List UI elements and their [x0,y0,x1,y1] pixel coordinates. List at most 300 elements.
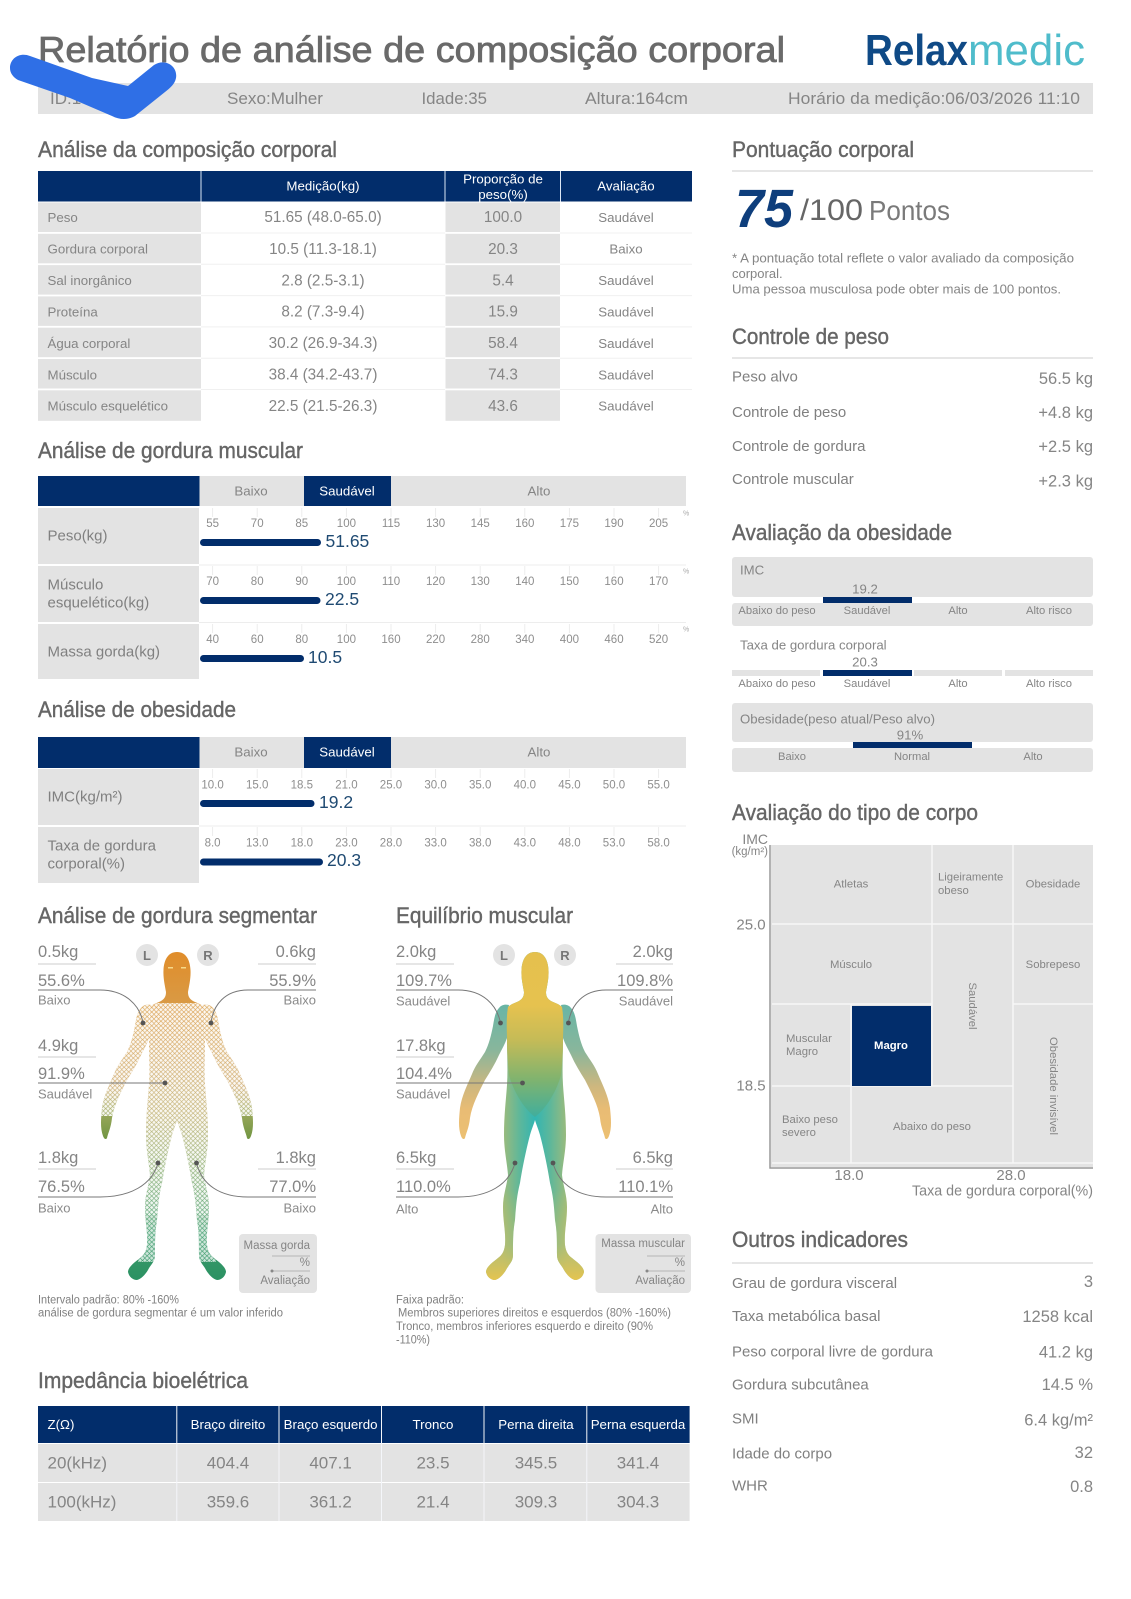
note: score explanation: corporal. [732,266,783,281]
list: other indicators: 32 [1075,1444,1093,1462]
note: standard range: Intervalo padrão: 80% -160% [38,1294,179,1306]
badge: L [136,944,158,966]
note: standard range: Membros superiores direitos e esquerdos (80% -160%) [398,1308,671,1320]
row: Taxa de gordura corporal: 23.0 [335,838,358,850]
label: left leg muscle [396,1149,451,1216]
row: Massa gorda: 520 [649,634,668,646]
gauge: IMC: 19.2 [852,582,878,596]
row: Gordura corporal: Gordura corporal [48,242,148,256]
figure: wireframe body [97,952,257,1280]
logo: Relaxmedic [865,26,1085,75]
badge: L: L [500,948,508,963]
list: other indicators: 14.5 % [1042,1376,1093,1394]
row: Taxa de gordura corporal: 28.0 [380,838,402,850]
row: Massa gorda: 340 [515,634,534,646]
label: right leg muscle: 6.5kg [633,1149,673,1167]
row: Água corporal: 58.4 [488,335,518,352]
heading: weight control: Controle de peso [732,324,889,349]
list: other indicators: Peso corporal livre de gordura [732,1344,934,1360]
label: right arm muscle: 2.0kg [633,943,673,961]
label: right arm muscle: Saudável [619,994,673,1008]
score: 75/100: 75 [735,179,794,239]
row: Músculo esquelético: 140 [515,576,534,588]
table: body composition: Proporção de [463,172,543,186]
row: Massa gorda: 10.5 [308,647,342,667]
row: Músculo esquelético: 130 [471,576,490,588]
list: other indicators: 41.2 kg [1039,1344,1093,1362]
row: Taxa de gordura corporal: 18.0 [291,838,313,850]
chart: obesity analysis: Saudável [319,744,375,760]
row: Taxa de gordura corporal: 13.0 [246,838,268,850]
label: left leg fat: 76.5% [38,1178,85,1196]
gauge: IMC: IMC [740,562,765,578]
chart: muscle fat analysis [38,476,689,679]
chart: body type matrix: Saudável [966,982,978,1030]
row: Massa gorda: 60 [251,634,264,646]
chart: obesity analysis [38,737,686,883]
list: other indicators: SMI [732,1410,759,1428]
legend: fat mass [239,1234,317,1293]
score: 75/100 [735,179,950,239]
label: trunk muscle [396,1037,452,1102]
row: 100 kHz: 309.3 [515,1492,557,1512]
logo: Relaxmedic: Relax [865,26,968,75]
axis labels: 18.0 [834,1167,864,1184]
badge: R [197,944,219,966]
table: body composition: Medição(kg) [286,178,360,194]
row: Sal inorgânico: Sal inorgânico [48,273,132,288]
row: IMC: 35.0 [469,780,491,792]
row: Gordura corporal: Baixo [609,242,643,256]
axis labels: 18.5 [736,1078,766,1094]
header row: Perna esquerda [591,1417,686,1432]
gauge: body fat rate: Alto risco [1026,678,1072,690]
row: Sal inorgânico [48,272,654,290]
row: Sal inorgânico: Saudável [598,273,654,288]
row: Músculo esquelético: 22.5 [325,589,359,609]
row: Proteína: Proteína [48,304,98,320]
gauge: IMC: Saudável [844,605,890,617]
row: IMC: 55.0 [647,780,670,792]
row: Massa gorda: 80 [295,634,308,646]
gauge: IMC: Alto risco [1026,605,1072,617]
row: Músculo esquelético: % [683,568,689,576]
chart: muscle fat analysis: Saudável [319,484,375,498]
axis labels: 28.0 [996,1167,1026,1184]
chart: muscle fat analysis: Baixo [234,484,268,498]
table: body composition [38,171,692,421]
gauge: body fat rate: Alto [948,678,968,690]
label: right leg fat: 77.0% [269,1178,316,1196]
header row [48,1417,686,1432]
axis labels: (kg/m²) [732,846,768,858]
note: standard range: Faixa padrão: [396,1294,464,1306]
row: 20 kHz: 341.4 [617,1454,659,1472]
row: Taxa de gordura corporal: 53.0 [603,838,625,850]
label: right leg fat: 1.8kg [276,1149,316,1167]
chart: obesity analysis: Alto [528,744,550,760]
row: IMC: 18.5 [291,780,313,792]
label: trunk muscle: 104.4% [396,1065,452,1083]
label: left leg fat: 1.8kg [38,1149,78,1167]
row: Peso: 55 [206,518,219,530]
row: Sal inorgânico: 2.8 (2.5-3.1) [281,272,365,290]
gauge: IMC [732,557,1093,626]
heading: body composition analysis: Análise da composição corporal [38,137,337,162]
chart: body type matrix: Muscular [786,1033,832,1045]
header row: Tronco [413,1417,453,1432]
chart: body type matrix: Obesidade [1026,878,1080,890]
axis labels: 25.0 [736,916,766,934]
list: weight control: Controle muscular [732,471,854,488]
patient info bar: Horário da medição:06/03/2026 11:10 [788,89,1080,108]
row: Músculo esquelético: 110 [382,576,400,588]
row: Peso: Peso [48,210,78,225]
header row: Perna direita [498,1417,574,1432]
row: Peso: 130 [426,518,445,530]
row: Taxa de gordura corporal: 20.3 [327,850,361,870]
table: bioimpedance [38,1406,690,1521]
list: weight control: Controle de peso [732,404,846,421]
connector lines [396,990,673,1197]
heading: obesity evaluation: Avaliação da obesidade [732,520,952,545]
logo: Relaxmedic: medic [968,26,1085,75]
label: right leg fat: Baixo [283,1200,316,1216]
legend: muscle mass: Avaliação [635,1275,685,1287]
label: trunk fat [38,1037,92,1102]
label: left leg fat: Baixo [38,1200,71,1216]
label: right leg muscle: 110.1% [618,1178,673,1196]
row: Músculo esquelético: esquelético(kg) [48,594,149,612]
label: right arm fat: 0.6kg [276,943,316,961]
row: Músculo esquelético: Músculo esquelético [48,398,168,414]
row: Peso [48,209,654,226]
highlighted cell: Magro: Magro [874,1040,908,1052]
chart: body type matrix: Sobrepeso [1026,959,1080,971]
row: Músculo esquelético: 90 [295,576,308,588]
list: other indicators: Grau de gordura visceral [732,1275,897,1292]
panel: muscle balance [396,943,691,1346]
note: standard range: análise de gordura segmentar é um valor inferido [38,1308,283,1320]
patient info bar [38,83,1093,114]
label: right leg fat [269,1149,316,1216]
legend: fat mass: Massa gorda [244,1240,311,1252]
row: 20 kHz: 20(kHz) [48,1454,107,1472]
gauge: obesity ratio: Normal [894,751,930,763]
note: score explanation [732,250,1074,296]
label: left leg muscle: 110.0% [396,1178,451,1196]
title: Relatório de análise de composição corporal [38,29,785,70]
table: body composition: Avaliação [597,178,655,194]
label: left leg fat [38,1149,85,1216]
score: 75/100: Pontos [869,195,950,226]
badge: L: L [143,948,151,963]
row: Músculo esquelético: Músculo [48,576,103,594]
row: Peso: 160 [515,518,534,530]
row: Massa gorda: 220 [426,634,445,646]
header row: Braço direito [191,1417,265,1432]
list: other indicators: Idade do corpo [732,1446,832,1462]
gauge: obesity ratio: Baixo [778,751,806,763]
list: other indicators: Gordura subcutânea [732,1376,869,1394]
axis labels: Taxa de gordura corporal(%) [912,1182,1093,1200]
row: Músculo esquelético: 170 [649,576,668,588]
row: Água corporal: Saudável [598,336,654,351]
chart: body type matrix: Magro [786,1046,818,1058]
list: other indicators: 6.4 kg/m² [1024,1412,1093,1430]
panel: segmental fat [38,943,317,1320]
row: Massa gorda: 160 [381,634,401,646]
header row: Z(Ω) [48,1417,74,1432]
row: 100 kHz [48,1492,659,1512]
row: Peso: 100 [337,518,356,530]
row: IMC: 40.0 [514,780,536,792]
row: Sal inorgânico: 5.4 [492,272,514,290]
row: Músculo esquelético [48,568,689,612]
row: 20 kHz [48,1454,659,1472]
row: IMC: 30.0 [424,780,447,792]
list: weight control: Controle de gordura [732,438,866,455]
row: Taxa de gordura corporal [48,838,670,872]
row: Massa gorda: 400 [560,634,579,646]
row: IMC: 25.0 [380,780,402,792]
legend: fat mass: Avaliação [260,1275,310,1287]
row: Massa gorda: 460 [604,634,624,646]
row: IMC: 10.0 [201,780,224,792]
axis labels: IMC [742,831,768,847]
label: left arm muscle: Saudável [396,994,450,1008]
highlighted cell: Magro [852,1006,931,1086]
row: IMC: 15.0 [246,780,268,792]
row: Peso: Saudável [598,210,654,225]
chart: body type matrix: severo [782,1127,816,1139]
label: right arm fat [269,943,316,1008]
row: Água corporal: 30.2 (26.9-34.3) [269,335,377,352]
list: weight control: +2.5 kg [1038,438,1093,456]
row: 20 kHz: 404.4 [207,1454,249,1472]
figure: solid gradient body [459,952,611,1280]
note: standard range [396,1294,671,1346]
row: Músculo esquelético: Saudável [598,398,654,414]
row: IMC: 21.0 [335,780,358,792]
row: Peso: 85 [295,518,308,530]
row: Peso: 205 [649,518,668,530]
row: Taxa de gordura corporal: 58.0 [647,838,670,850]
row: Peso: 70 [251,518,264,530]
label: trunk fat: 91.9% [38,1065,85,1083]
header row: Braço esquerdo [284,1417,378,1432]
row: Músculo esquelético: 120 [426,576,445,588]
badge: R: R [203,948,213,963]
row: Peso: Peso(kg) [48,528,108,544]
label: right arm muscle [617,943,673,1008]
row: Proteína: 15.9 [488,304,518,320]
row: Massa gorda: 280 [471,634,490,646]
note: score explanation: * A pontuação total reflete o valor avaliado da composição [732,250,1074,266]
heading: segmental fat analysis: Análise de gordura segmentar [38,903,317,928]
badge: R [554,944,576,966]
chart: body type matrix: obeso [938,885,969,897]
row: Gordura corporal [48,241,643,258]
label: right arm fat: 55.9% [269,972,316,990]
row: Massa gorda: 40 [206,634,219,646]
row: Proteína: Saudável [598,304,654,320]
legend: muscle mass: Massa muscular [601,1238,685,1250]
row: Taxa de gordura corporal: Taxa de gordura [48,838,157,854]
row: Peso: 51.65 (48.0-65.0) [264,209,382,226]
row: Massa gorda: % [683,626,689,634]
row: Músculo esquelético: 70 [206,576,219,588]
row: Peso: 100.0 [484,209,522,226]
chart: obesity analysis: Baixo [234,744,268,760]
row: Taxa de gordura corporal: 38.0 [469,838,491,850]
row: 100 kHz: 304.3 [617,1492,659,1512]
row: Músculo esquelético: 160 [604,576,624,588]
row: Massa gorda [48,626,689,667]
gauge: body fat rate: Taxa de gordura corporal [740,638,887,652]
row: Músculo: Músculo [48,368,97,382]
row: IMC [48,780,670,812]
heading: body type evaluation: Avaliação do tipo de corpo [732,800,978,825]
label: left arm fat [38,943,85,1008]
gauge: obesity ratio: Alto [1023,751,1043,763]
table: body composition: peso(%) [478,187,528,202]
row: Gordura corporal: 20.3 [488,241,518,258]
gauge: body fat rate: Abaixo do peso [738,678,816,690]
list: other indicators [732,1273,1093,1496]
label: right leg muscle: Alto [651,1202,673,1216]
row: 100 kHz: 100(kHz) [48,1492,116,1512]
patient info bar: ID:1 [50,89,81,108]
label: trunk muscle: 17.8kg [396,1037,446,1055]
heading: muscle fat analysis: Análise de gordura muscular [38,438,303,463]
patient info bar: Idade:35 [422,89,487,108]
patient info bar: Altura:164cm [585,89,688,108]
chart: body type matrix: Abaixo do peso [893,1121,971,1133]
label: trunk fat: 4.9kg [38,1037,78,1055]
list: weight control: +4.8 kg [1038,404,1093,422]
heading: bioimpedance: Impedância bioelétrica [38,1368,249,1393]
chart: body type matrix: Ligeiramente [938,872,1003,884]
legend: muscle mass: % [675,1257,685,1269]
list: other indicators: 3 [1084,1273,1093,1291]
list: weight control [732,368,1093,490]
label: right leg muscle [618,1149,673,1216]
label: right arm fat: Baixo [283,992,316,1008]
note: standard range: -110%) [396,1334,430,1346]
heading: body score: Pontuação corporal [732,137,914,162]
row: Músculo esquelético: 43.6 [488,398,518,415]
gauge: obesity ratio: 91% [897,728,923,742]
gauge: body fat rate: 20.3 [852,654,878,670]
panel: obesity evaluation [732,557,1093,772]
row: Músculo: 38.4 (34.2-43.7) [269,366,377,384]
label: left arm muscle: 109.7% [396,972,452,990]
row: Água corporal [48,335,654,352]
legend: muscle mass [596,1234,691,1293]
row: Músculo esquelético: 150 [560,576,579,588]
list: other indicators: 0.8 [1070,1478,1093,1496]
label: right arm muscle: 109.8% [617,972,673,990]
row: Músculo: 74.3 [488,366,518,384]
label: left arm fat: 55.6% [38,972,85,990]
badge: L [493,944,515,966]
gauge: IMC: Alto [948,605,968,617]
label: left arm muscle: 2.0kg [396,943,436,961]
chart: body type matrix: Baixo peso [782,1114,838,1126]
row: IMC: 45.0 [558,780,581,792]
row: Músculo esquelético: 80 [251,576,264,588]
row: Peso: 115 [382,518,400,530]
row: IMC: IMC(kg/m²) [48,788,122,806]
label: trunk muscle: Saudável [396,1086,450,1102]
note: standard range: Tronco, membros inferiores esquerdo e direito (90% [396,1321,653,1333]
chart: body type matrix: Obesidade invisível [1047,1037,1059,1135]
legend: fat mass: % [300,1257,310,1269]
row: 20 kHz: 407.1 [309,1454,352,1472]
label: left leg muscle: Alto [396,1202,418,1216]
row: Proteína: 8.2 (7.3-9.4) [281,304,365,320]
gauge: body fat rate [732,638,1093,690]
row: IMC: 19.2 [319,792,353,812]
gauge: obesity ratio: Obesidade(peso atual/Peso alvo) [740,712,935,726]
score: 75/100: /100 [800,194,863,227]
row: 100 kHz: 361.2 [309,1492,352,1512]
heading: muscle balance: Equilíbrio muscular [396,903,573,928]
chart: body type matrix [732,831,1093,1200]
label: left arm muscle [396,943,452,1008]
label: left arm fat: Baixo [38,992,71,1008]
list: other indicators: 1258 kcal [1022,1308,1093,1326]
row: Músculo esquelético: 22.5 (21.5-26.3) [269,398,377,415]
label: left leg muscle: 6.5kg [396,1149,436,1167]
row: 20 kHz: 345.5 [515,1454,557,1472]
list: weight control: Peso alvo [732,368,798,386]
row: Peso [48,510,689,551]
heading: obesity analysis: Análise de obesidade [38,697,236,722]
gauge: IMC: Abaixo do peso [738,605,816,617]
gauge: body fat rate: Saudável [844,678,890,690]
label: left arm fat: 0.5kg [38,943,78,961]
row: Peso: 175 [560,518,579,530]
row: 20 kHz: 23.5 [416,1454,450,1472]
row: Músculo esquelético: 100 [337,576,356,588]
list: other indicators: WHR [732,1478,768,1494]
note: score explanation: Uma pessoa musculosa pode obter mais de 100 pontos. [732,282,1061,296]
chart: body type matrix: Músculo [830,959,872,971]
row: Taxa de gordura corporal: corporal(%) [48,856,125,872]
row: Gordura corporal: 10.5 (11.3-18.1) [269,241,377,258]
row: Água corporal: Água corporal [48,336,130,351]
row: Taxa de gordura corporal: 8.0 [205,838,221,850]
row: Peso: 190 [604,518,624,530]
row: Músculo esquelético [48,398,654,415]
row: 100 kHz: 21.4 [416,1492,450,1512]
row: Proteína [48,304,654,320]
row: Peso: % [683,510,689,518]
axis labels [732,831,1093,1200]
badge: R: R [560,948,570,963]
row: Taxa de gordura corporal: 33.0 [424,838,447,850]
row: Massa gorda: Massa gorda(kg) [48,644,160,660]
list: weight control: 56.5 kg [1039,370,1093,388]
row: Músculo [48,366,654,384]
list: weight control: +2.3 kg [1038,472,1093,490]
row: 100 kHz: 359.6 [207,1492,249,1512]
row: Taxa de gordura corporal: 43.0 [514,838,536,850]
patient info bar: Sexo:Mulher [227,89,323,108]
row: Taxa de gordura corporal: 48.0 [558,838,581,850]
